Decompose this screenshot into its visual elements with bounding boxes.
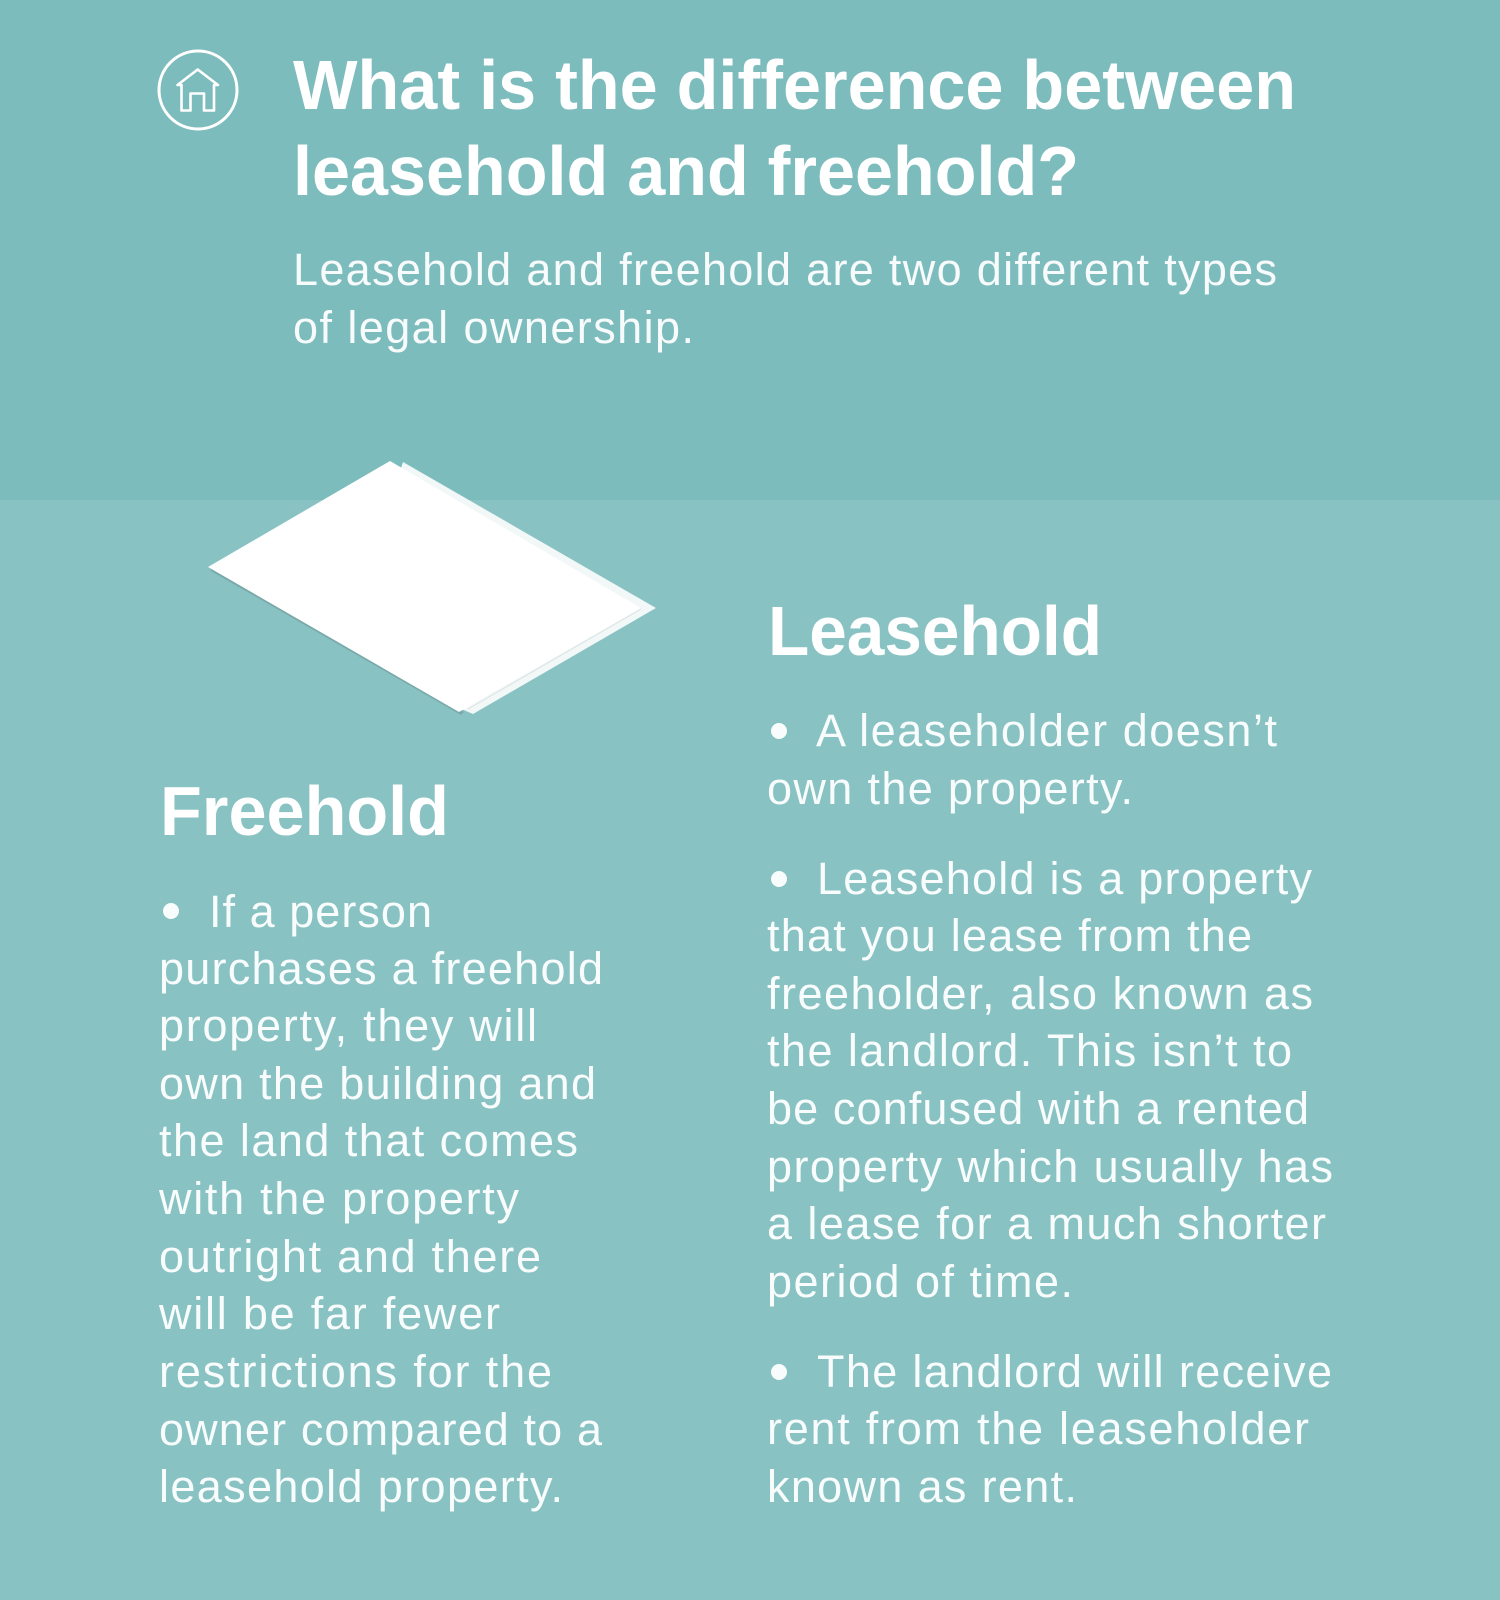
- leasehold bullet 1: [767, 705, 1277, 814]
- leasehold bullet 2: period of time.: [767, 1256, 1073, 1307]
- illustration: stacked paper sheets: [208, 461, 656, 715]
- freehold bullet text: If a person: [209, 886, 432, 937]
- lower background panel: [0, 500, 1500, 1600]
- freehold bullet text: restrictions for the: [159, 1346, 552, 1397]
- freehold bullet text: the land that comes: [159, 1115, 578, 1166]
- leasehold bullet 3: [767, 1346, 1332, 1512]
- title: What is the difference between: [293, 46, 1296, 124]
- leasehold bullet 1: A leaseholder doesn’t: [816, 705, 1277, 756]
- freehold bullet text: owner compared to a: [159, 1404, 603, 1455]
- leasehold bullet 2: a lease for a much shorter: [767, 1198, 1326, 1249]
- freehold bullet text: with the property: [158, 1173, 520, 1224]
- leasehold bullet 2: that you lease from the: [767, 910, 1252, 961]
- leasehold bullet 2: freeholder, also known as: [767, 968, 1313, 1019]
- freehold bullet text: leasehold property.: [159, 1461, 563, 1512]
- intro text: of legal ownership.: [293, 302, 694, 353]
- title: [293, 46, 1296, 210]
- leasehold bullet 2: property which usually has: [767, 1141, 1333, 1192]
- leasehold bullet 2: [767, 853, 1333, 1307]
- heading: Leasehold: Leasehold: [768, 592, 1102, 670]
- freehold bullet text: will be far fewer: [158, 1288, 500, 1339]
- icon: house in circle: [159, 51, 237, 129]
- header background band: [0, 0, 1500, 500]
- freehold bullet text: outright and there: [159, 1231, 541, 1282]
- leasehold bullet 3: known as rent.: [767, 1461, 1077, 1512]
- leasehold bullet 1: own the property.: [767, 763, 1133, 814]
- intro text: [293, 244, 1277, 353]
- title: leasehold and freehold?: [293, 132, 1079, 210]
- leasehold bullet 2: the landlord. This isn’t to: [767, 1025, 1292, 1076]
- heading: Freehold: Freehold: [160, 772, 449, 850]
- freehold bullet text: purchases a freehold: [159, 943, 603, 994]
- freehold bullet text: own the building and: [159, 1058, 596, 1109]
- leasehold bullet 2: be confused with a rented: [767, 1083, 1309, 1134]
- leasehold bullet 3: The landlord will receive: [817, 1346, 1332, 1397]
- leasehold bullet 3: rent from the leaseholder: [767, 1403, 1309, 1454]
- freehold bullet text: property, they will: [159, 1000, 537, 1051]
- leasehold bullet 2: Leasehold is a property: [817, 853, 1312, 904]
- freehold bullet text: [158, 886, 603, 1512]
- intro text: Leasehold and freehold are two different types: [293, 244, 1277, 295]
